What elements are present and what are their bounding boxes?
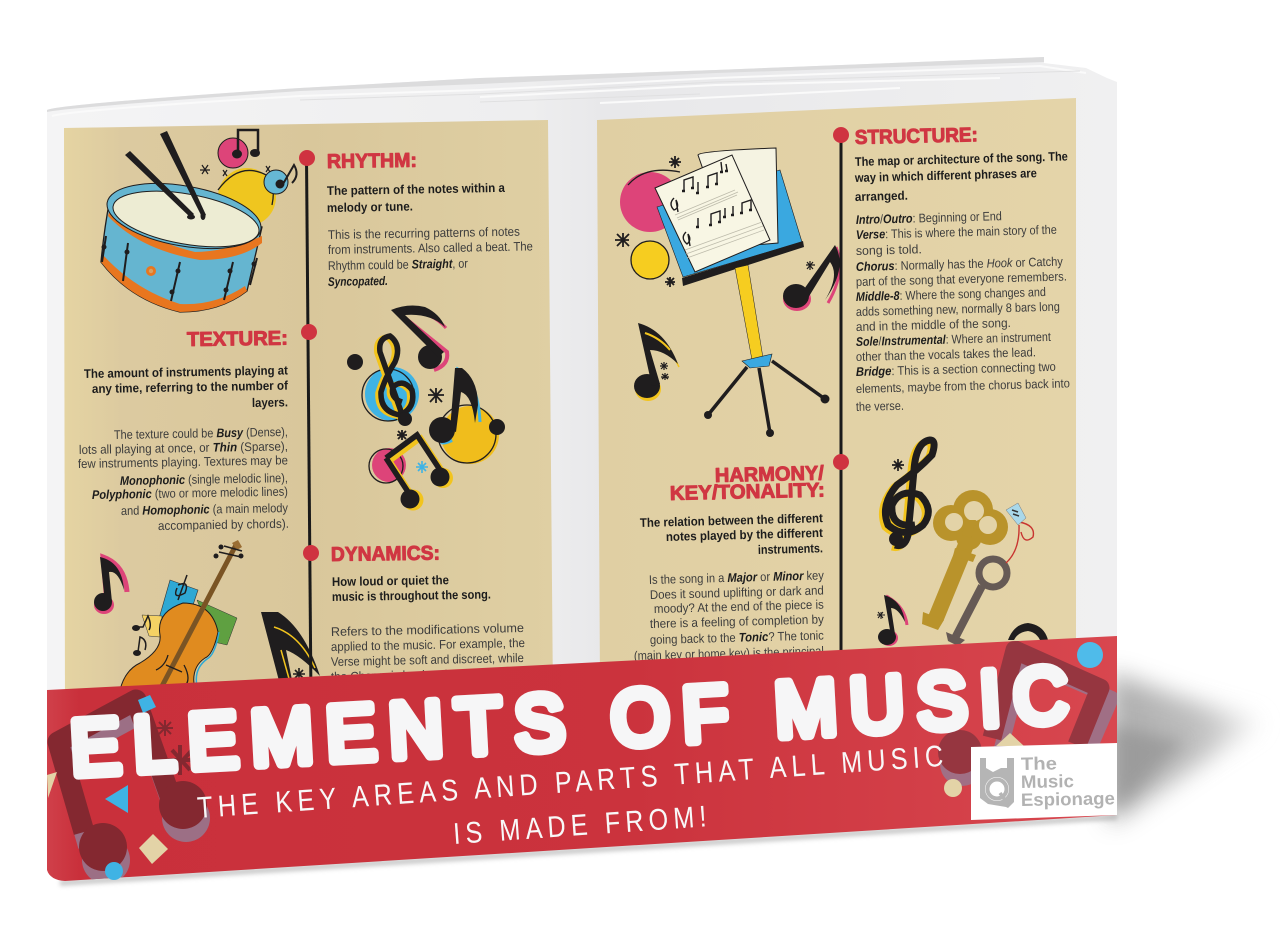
text block: dynamics: Verse might be soft and discreet, while xyxy=(331,651,524,669)
text block: harmony: there is a feeling of completion by xyxy=(650,612,825,631)
text block: texture: The texture could be Busy (Dense), xyxy=(114,425,288,442)
text block: texture: and Homophonic (a main melody xyxy=(121,501,289,518)
text block: structure: adds something new, normally 8 bars long xyxy=(856,300,1060,319)
text block: harmony xyxy=(634,511,825,663)
icon: logo hand and Q xyxy=(980,758,1014,808)
text block: texture: layers. xyxy=(252,395,288,410)
text block: texture: Monophonic (single melodic line), xyxy=(120,471,288,488)
heading: dynamics: DYNAMICS: xyxy=(331,542,440,566)
text block: texture: any time, referring to the number of xyxy=(92,379,289,396)
icon: black note with yellow edge xyxy=(634,323,679,401)
text block: dynamics: applied to the music. For example, the xyxy=(331,636,525,654)
text block: structure: Intro/Outro: Beginning or End xyxy=(856,209,1002,227)
icon: large black note xyxy=(261,612,320,700)
text block: harmony: notes played by the different xyxy=(666,526,824,544)
text block: structure: Sole/Instrumental: Where an instrument xyxy=(856,330,1051,349)
text block: structure: arranged. xyxy=(855,189,908,204)
text block: structure: Bridge: This is a section connecting two xyxy=(856,360,1056,379)
text block: texture: The amount of instruments playing at xyxy=(84,363,289,381)
text block: structure: Middle-8: Where the song changes and xyxy=(856,285,1046,304)
book drop shadow xyxy=(60,672,1262,886)
text block: rhythm: This is the recurring patterns of notes xyxy=(328,225,520,242)
illustration: treble clef xyxy=(882,440,934,548)
text block: harmony: The relation between the different xyxy=(640,511,824,530)
icon: pink-edged note xyxy=(877,595,907,646)
logo wordmark xyxy=(1021,753,1115,810)
text block: dynamics: music is throughout the song. xyxy=(332,588,491,604)
text block: rhythm xyxy=(327,181,533,289)
logo wordmark: The xyxy=(1021,753,1057,774)
text block: structure: other than the vocals takes the lead. xyxy=(856,345,1036,364)
heading: harmony key tonality: KEY/TONALITY: xyxy=(670,479,825,505)
text block: rhythm: from instruments. Also called a beat. The xyxy=(328,239,533,257)
timeline: right page xyxy=(833,127,849,650)
text block: rhythm: melody or tune. xyxy=(327,200,413,215)
booklet pages xyxy=(47,57,1117,740)
text block: structure: the verse. xyxy=(856,399,904,414)
text block: texture xyxy=(78,363,289,533)
panel: left page xyxy=(64,120,553,720)
text block: texture: few instruments playing. Textures may be xyxy=(78,453,288,471)
decoration: left translucent note xyxy=(58,700,210,884)
logo wordmark: Espionage xyxy=(1021,788,1115,810)
text block: texture: Polyphonic (two or more melodic lines) xyxy=(92,485,288,502)
icon: pink note xyxy=(94,557,127,614)
text block: harmony: moody? At the end of the piece is xyxy=(654,598,824,616)
text block: structure: elements, maybe from the chorus back into xyxy=(856,376,1070,396)
text block: structure: Verse: This is where the main story of the xyxy=(856,223,1057,242)
icon: black note with pink edge xyxy=(783,245,840,311)
text block: harmony: Is the song in a Major or Minor key xyxy=(649,568,825,587)
heading: texture: TEXTURE: xyxy=(187,328,288,351)
text block: dynamics: Refers to the modifications volume xyxy=(331,621,524,639)
illustration: music stand xyxy=(615,148,830,437)
icon: note arc above band xyxy=(1008,623,1048,640)
text block: structure: part of the song that everyone remembers. xyxy=(856,269,1067,289)
text block: harmony: (main key or home key) is the principal xyxy=(634,644,824,663)
illustration: cello xyxy=(120,540,244,690)
heading: harmony key tonality: HARMONY/ xyxy=(715,463,825,487)
text block: structure: Chorus: Normally has the Hook or Catchy xyxy=(856,255,1064,274)
text block: dynamics xyxy=(331,573,525,684)
title: ELEMENTS OF MUSIC xyxy=(68,652,1070,792)
heading: structure: STRUCTURE: xyxy=(855,124,978,149)
subtitle: IS MADE FROM! xyxy=(452,799,708,850)
text block: rhythm: The pattern of the notes within a xyxy=(327,181,506,198)
decoration: right translucent note xyxy=(938,650,1112,786)
subtitle: THE KEY AREAS AND PARTS THAT ALL MUSIC xyxy=(196,739,944,824)
text block: harmony: going back to the Tonic? The tonic xyxy=(650,628,824,647)
panel: right page xyxy=(597,98,1076,690)
decoration: coloured shapes xyxy=(47,642,1103,880)
text block: rhythm: Rhythm could be Straight, or xyxy=(328,257,468,273)
text block: structure: way in which different phrases are xyxy=(854,166,1037,185)
text block: dynamics: the Chorus is loud and powerful. The xyxy=(331,666,521,684)
logo wordmark: Music xyxy=(1021,771,1074,792)
illustration: keys xyxy=(922,490,1033,646)
heading: harmony key tonality xyxy=(670,463,825,505)
text block: structure: song is told. xyxy=(856,242,922,258)
text block: texture: accompanied by chords). xyxy=(158,517,289,533)
text block: texture: lots all playing at once, or Thin (Sparse), xyxy=(79,439,288,457)
heading: rhythm: RHYTHM: xyxy=(327,150,417,173)
text block: rhythm: Syncopated. xyxy=(328,274,388,289)
illustration: drum xyxy=(101,130,297,312)
text block: structure: The map or architecture of the song. The xyxy=(855,149,1068,169)
logo: The Music Espionage xyxy=(971,743,1117,820)
timeline: left page xyxy=(299,150,319,700)
text block: structure xyxy=(854,149,1070,414)
panel: red cover band xyxy=(47,636,1117,884)
text block: harmony: Does it sound uplifting or dark and xyxy=(650,583,824,602)
text block: dynamics: How loud or quiet the xyxy=(332,573,449,589)
text block: structure: and in the middle of the song. xyxy=(856,316,1011,334)
text block: harmony: instruments. xyxy=(758,541,823,557)
icon: cluster of notes xyxy=(347,306,505,510)
